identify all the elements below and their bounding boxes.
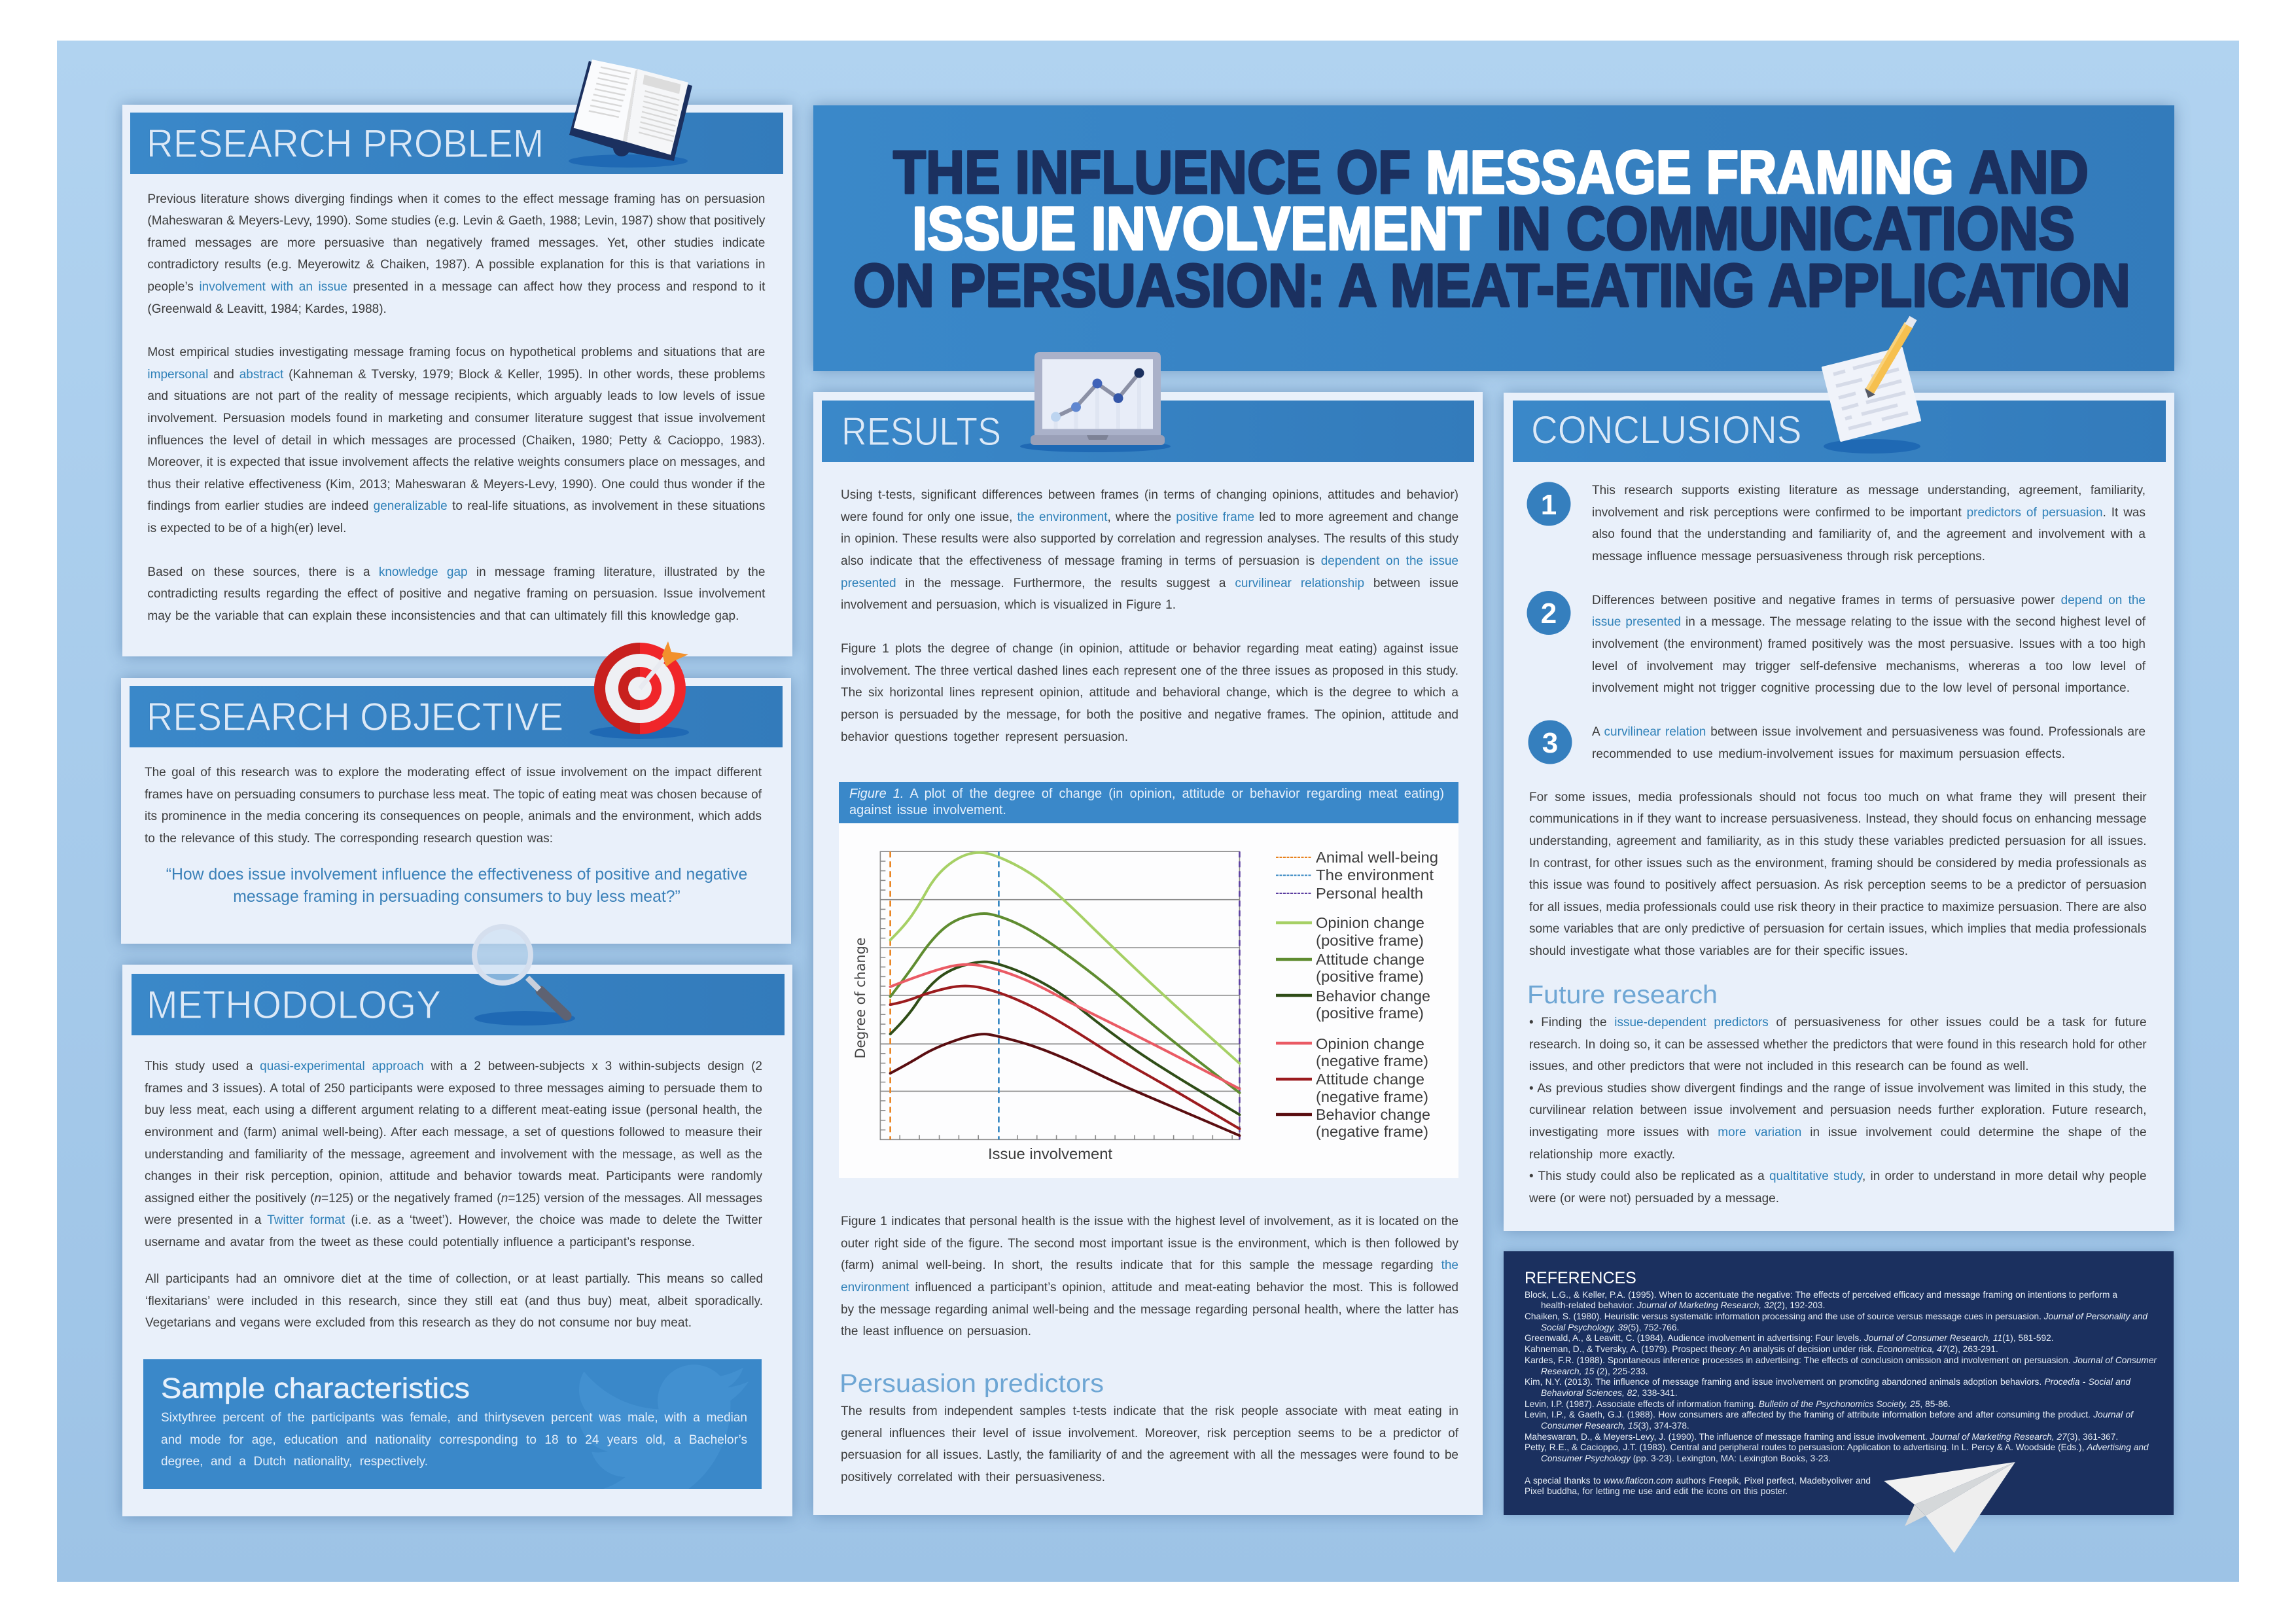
reference list: health-related behavior. Journal of Marketing Research, 32(2), 192-203. bbox=[1541, 1300, 1825, 1310]
header bar: research objective bbox=[130, 686, 783, 747]
title text: MESSAGE FRAMING bbox=[1426, 138, 1954, 206]
icon: laptop with line chart bbox=[1020, 352, 1171, 452]
line chart: degree of change vs issue involvement: Attitude change bbox=[1316, 1071, 1424, 1088]
icon: magnifying glass bbox=[474, 927, 575, 1026]
reference list: Maheswaran, D., & Meyers-Levy, J. (1990). The influence of message framing and issue involvement. Journal of Marketing Research, 27(3), 361-367. bbox=[1525, 1432, 2118, 1442]
text: sample characteristics: Sixtythree percent of the participants was female, and thirtyseven percent was male, with a median bbox=[161, 1411, 747, 1425]
text: results paragraph 1: were found for only one issue, the environment, where the positive frame led to more agreement and change bbox=[841, 510, 1458, 524]
text: research problem paragraph 3: Based on these sources, there is a knowledge gap in message framing literature, illustrated by the bbox=[147, 565, 765, 579]
text: conclusion 3: recommended to use medium-involvement issues for maximum persuasion effects. bbox=[1592, 747, 2065, 761]
icon: twitter bird watermark: Sample characteristics bbox=[161, 1372, 470, 1404]
text: media professionals advice: this issue was found to positively affect persuasion. As risk perception seems to be a predictor of persuasion bbox=[1529, 878, 2147, 892]
text: research objective bbox=[145, 766, 762, 846]
text: sample characteristics: and mode for age, education and nationality corresponding to 18 to 24 years old, a Bachelor’s bbox=[161, 1433, 747, 1447]
text: future research bullets: issues, and other predictors that were not included in this research can be found as well. bbox=[1529, 1060, 2028, 1073]
text: results paragraph 1: presented in the message. Furthermore, the results suggest a curvilinear relationship between issue bbox=[841, 577, 1458, 590]
number badge 2 bbox=[1527, 591, 1570, 635]
reference list: Behavioral Sciences, 82, 338-341. bbox=[1541, 1388, 1678, 1398]
text: conclusion 2 bbox=[1592, 594, 2146, 695]
text: methodology paragraph 2: All participants had an omnivore diet at the time of collection, or at least partially. This means so called bbox=[145, 1272, 763, 1286]
reference list: Block, L.G., & Keller, P.A. (1995). When to accentuate the negative: The effects of perceived efficacy and message framing on intentions to perform a bbox=[1525, 1290, 2117, 1300]
text: sample characteristics bbox=[161, 1411, 747, 1469]
line chart: degree of change vs issue involvement: The environment bbox=[1316, 866, 1434, 883]
text: results paragraph 1 bbox=[841, 488, 1458, 612]
text: methodology paragraph 2 bbox=[145, 1272, 763, 1330]
text: conclusion 2: involvement (the environment) framed positively was the most persuasive. Issues with a too high bbox=[1592, 637, 2146, 651]
reference list: Levin, I.P. (1987). Associate effects of information framing. Bulletin of the Psychonomics Society, 25, 85-86. bbox=[1525, 1399, 1951, 1409]
text: sample characteristics: degree, and a Dutch nationality, respectively. bbox=[161, 1455, 428, 1469]
text: media professionals advice: communications in if they want to increase persuasiveness. Instead, they should focus on enhancing message bbox=[1529, 812, 2147, 826]
panel: results bbox=[813, 392, 1483, 1515]
heading: results: RESULTS bbox=[841, 410, 1001, 454]
text: methodology paragraph 2: ‘flexitarians’ were included in this research, since they still eat (and thus buy) meat, albeit sporadically. bbox=[145, 1294, 763, 1308]
text: persuasion predictors: persuasion for all issues. Lastly, the familiarity of and the agreement with all the messages were found to be bbox=[841, 1448, 1458, 1462]
icon: note with pencil bbox=[1823, 318, 1920, 454]
line chart: degree of change vs issue involvement: Behavior change bbox=[1316, 1106, 1430, 1123]
text: conclusion 1: also found that the understanding and familiarity of, and the agreement and involvement with a bbox=[1592, 527, 2146, 541]
panel: poster title bbox=[813, 105, 2174, 371]
text: future research bullets: • Finding the issue-dependent predictors of persuasiveness for other issues could be a task for future bbox=[1529, 1016, 2147, 1029]
text: results paragraph 3: Figure 1 indicates that personal health is the issue with the highest level of involvement, as it is located on the bbox=[841, 1215, 1458, 1228]
line chart: degree of change vs issue involvement: Animal well-being bbox=[1316, 849, 1438, 866]
line chart: degree of change vs issue involvement: Behavior change bbox=[1316, 988, 1430, 1005]
text: results paragraph 1: Using t-tests, significant differences between frames (in terms of changing opinions, attitudes and behavior) bbox=[841, 488, 1458, 502]
line chart: degree of change vs issue involvement: (positive frame) bbox=[1316, 1005, 1424, 1022]
text: research problem paragraph 2: Most empirical studies investigating message framing focus on hypothetical problems and situations that are bbox=[147, 346, 765, 359]
line chart: degree of change vs issue involvement: (negative frame) bbox=[1316, 1123, 1428, 1140]
heading: research objective: RESEARCH OBJECTIVE bbox=[147, 695, 563, 739]
text: research problem paragraph 2: involvement. Persuasion models found in marketing and consumer literature suggest that issue involvement bbox=[147, 412, 765, 425]
figure caption bbox=[839, 782, 1458, 823]
line chart: degree of change vs issue involvement: Degree of change bbox=[853, 937, 868, 1059]
text: results paragraph 2: involvement. The three vertical dashed lines each represent one of the three issues as proposed in this study. bbox=[841, 664, 1458, 678]
figure 1 bbox=[839, 782, 1458, 1178]
text: research problem paragraph 3: may be the variable that can explain these inconsistencies and that can ultimately fill this knowledge gap. bbox=[147, 609, 739, 623]
line chart: degree of change vs issue involvement: (negative frame) bbox=[1316, 1088, 1428, 1105]
reference list: Social Psychology, 39(5), 752-766. bbox=[1541, 1323, 1679, 1332]
icon: open book bbox=[569, 60, 692, 168]
line chart: degree of change vs issue involvement: (negative frame) bbox=[1316, 1052, 1428, 1069]
title text: ISSUE INVOLVEMENT bbox=[912, 194, 1481, 262]
text: future research bullets bbox=[1529, 1016, 2147, 1205]
text: methodology paragraph 1: environment and (farm) animal well-being). After each message, a set of questions followed to measure their bbox=[145, 1126, 762, 1139]
text: methodology paragraph 1: frames and 3 issues). A total of 250 participants were exposed to three messages aiming to persuade them to bbox=[145, 1082, 762, 1096]
text: research problem paragraph 1: framed messages are more persuasive than negatively framed messages. Yet, other studies indicate bbox=[147, 236, 765, 250]
text: research problem paragraph 3 bbox=[147, 565, 766, 623]
reference list: Consumer Psychology (pp. 3-23). Lexington, MA: Lexington Books, 3-23. bbox=[1541, 1454, 1831, 1463]
number badge 1: 1 bbox=[1541, 489, 1557, 521]
text: research objective: to the relevance of this study. The corresponding research question was: bbox=[145, 832, 553, 846]
text: methodology paragraph 2: Vegetarians and vegans were excluded from this research as they do not consume nor buy meat. bbox=[145, 1316, 692, 1330]
number badge 3: 3 bbox=[1542, 727, 1558, 759]
text: methodology paragraph 1: understanding and familiarity of the message, agreement and involvement with the message, as well as the bbox=[145, 1148, 762, 1162]
text: media professionals advice: some variables that are only predictive of persuasion for certain issues, which implies that media professionals bbox=[1529, 922, 2147, 936]
icon credits bbox=[1525, 1476, 1871, 1496]
text: results paragraph 3 bbox=[841, 1215, 1458, 1338]
text: conclusion 2: level of involvement may trigger self-defensive mechanisms, whereras a too low level of bbox=[1592, 660, 2146, 673]
text: results paragraph 2: behavior questions together represent persuasion. bbox=[841, 730, 1128, 744]
heading: references: REFERENCES bbox=[1525, 1269, 1636, 1287]
text: conclusion 2: Differences between positive and negative frames in terms of persuasive power depend on the bbox=[1592, 594, 2146, 607]
line chart: degree of change vs issue involvement bbox=[853, 849, 1438, 1162]
research question callout: message framing in persuading consumers to buy less meat?” bbox=[233, 888, 680, 906]
text: results paragraph 1: also indicate that the effectiveness of message framing in terms of persuasion is dependent on the issue bbox=[841, 554, 1458, 568]
subheading: future research: Future research bbox=[1527, 981, 1718, 1009]
research question callout bbox=[166, 866, 747, 906]
text: research problem paragraph 2 bbox=[147, 346, 766, 535]
reference list: Petty, R.E., & Cacioppo, J.T. (1983). Central and peripheral routes to persuasion: Application to advertising. In L. Percy & A. Woodside (Eds.), Advertising and bbox=[1525, 1442, 2149, 1452]
text: media professionals advice: understanding, agreement and familiarity, as in this study these variables predicted persuasion for all issues. bbox=[1529, 834, 2147, 848]
panel: references bbox=[1504, 1251, 2174, 1515]
heading: methodology: METHODOLOGY bbox=[147, 983, 441, 1027]
text: media professionals advice: In contrast, for other issues such as the environment, framing should be considered by media professionals as bbox=[1529, 857, 2147, 870]
text: conclusion 1: This research supports existing literature as message understanding, agreement, familiarity, bbox=[1592, 484, 2146, 497]
reference list: Greenwald, A., & Leavitt, C. (1984). Audience involvement in advertising: Four levels. Journal of Consumer Research, 11(1), 581-592. bbox=[1525, 1333, 2053, 1343]
line chart: degree of change vs issue involvement: Attitude change bbox=[1316, 951, 1424, 968]
reference list: Levin, I.P., & Gaeth, G.J. (1988). How consumers are affected by the framing of attribute information before and after consuming the product. Journal of bbox=[1525, 1410, 2133, 1419]
line chart: degree of change vs issue involvement: (positive frame) bbox=[1316, 968, 1424, 985]
icon: target with arrow bbox=[590, 641, 689, 739]
heading: conclusions: CONCLUSIONS bbox=[1531, 408, 1802, 452]
text: research problem paragraph 1: people’s involvement with an issue presented in a message can affect how they process and respond to it bbox=[147, 280, 765, 294]
text: results paragraph 1: involvement and persuasion, which is visualized in Figure 1. bbox=[841, 598, 1176, 612]
text: methodology paragraph 1: assigned either the positively (n=125) or the negatively framed (n=125) version of the messages. All messages bbox=[145, 1192, 762, 1205]
text: future research bullets: curvilinear relation between issue involvement and persuasion needs further exploration. Future research, bbox=[1529, 1103, 2147, 1117]
panel: conclusions bbox=[1504, 393, 2174, 1231]
text: methodology paragraph 1: were presented in a Twitter format (i.e. as a ‘tweet’). However, the choice was made to delete the Twitter bbox=[145, 1213, 762, 1227]
number badge 2: 2 bbox=[1541, 597, 1557, 630]
reference list: Kardes, F.R. (1988). Spontaneous inference processes in advertising: The effects of conclusion omission and involvement on persuasion. Journal of Consumer bbox=[1525, 1355, 2157, 1365]
reference list bbox=[1525, 1290, 2157, 1463]
text: research problem paragraph 3: contradicting results regarding the effect of positive and negative framing on persuasion. Issue involvement bbox=[147, 587, 765, 601]
text: research objective: its prominence in the media concering its consequences on people, animals and the environment, which adds bbox=[145, 810, 762, 823]
text: results paragraph 3: the least influence on persuasion. bbox=[841, 1325, 1031, 1338]
text: research problem paragraph 1: contradictory results (e.g. Meyerowitz & Chaiken, 1987). A possible explanation for this is that variations in bbox=[147, 258, 765, 272]
text: research problem paragraph 2: thus their relative effectiveness (Kim, 2013; Maheswaran & Meyers-Levy, 1990). One could thus wonder if the bbox=[147, 478, 765, 491]
heading: research problem: RESEARCH PROBLEM bbox=[147, 122, 544, 166]
text: research problem paragraph 2: impersonal and abstract (Kahneman & Tversky, 1979; Block & Keller, 1995). In other words, these problems bbox=[147, 368, 765, 382]
callout: sample characteristics bbox=[143, 1359, 762, 1489]
text: results paragraph 3: (farm) animal well-being. In short, the results indicate that for this sample the message regarding the bbox=[841, 1258, 1458, 1272]
text: future research bullets: investigating more issues with more variation in issue involvement could determine the shape of the bbox=[1529, 1126, 2147, 1139]
text: research problem paragraph 2: findings from earlier studies are indeed generalizable to real-life situations, as involvement in these situations bbox=[147, 499, 765, 513]
text: conclusion 3 bbox=[1592, 725, 2146, 761]
panel: research problem bbox=[122, 105, 792, 656]
reference list: Consumer Research, 15(3), 374-378. bbox=[1541, 1421, 1689, 1431]
text: conclusion 3: A curvilinear relation between issue involvement and persuasiveness was found. Professionals are bbox=[1592, 725, 2146, 739]
icon: paper plane bbox=[1884, 1462, 2015, 1553]
text: research problem paragraph 2: Moreover, it is expected that issue involvement affects the relative weights consumers place on messages, and bbox=[147, 455, 765, 469]
text: persuasion predictors: The results from independent samples t-tests indicate that the risk people associate with meat eating in bbox=[841, 1404, 1458, 1418]
title text: THE INFLUENCE OF bbox=[893, 138, 1411, 206]
text: research objective: frames have on persuading consumers to purchase less meat. The topic of eating meat was chosen because of bbox=[145, 788, 762, 802]
line chart: degree of change vs issue involvement: Personal health bbox=[1316, 885, 1423, 902]
text: research problem paragraph 1: (Greenwald & Leavitt, 1984; Kardes, 1988). bbox=[147, 302, 387, 316]
figure caption: against issue involvement. bbox=[849, 802, 1006, 817]
icon credits: Pixel buddha, for letting me use and edit the icons on this poster. bbox=[1525, 1486, 1788, 1496]
header bar: conclusions bbox=[1513, 401, 2166, 462]
text: methodology paragraph 1: buy less meat, each using a different argument relating to a different meat-eating issue (personal health, the bbox=[145, 1103, 762, 1117]
text: results paragraph 2: person is persuaded by the message, for both the positive and negative frames. The opinion, attitude and bbox=[841, 708, 1458, 722]
icon credits: A special thanks to www.flaticon.com authors Freepik, Pixel perfect, Madebyoliver and bbox=[1525, 1476, 1871, 1486]
text: methodology paragraph 1: username and avatar from the tweet as these could potentially influence a participant’s response. bbox=[145, 1236, 695, 1249]
text: future research bullets: • As previous studies show divergent findings and the range of issue involvement was limited in this study, the bbox=[1529, 1082, 2147, 1096]
number badge 1 bbox=[1527, 482, 1570, 526]
title text bbox=[853, 138, 2130, 319]
text: media professionals advice: For some issues, media professionals should not focus too much on what frame they will present their bbox=[1529, 791, 2147, 804]
line chart: degree of change vs issue involvement: (positive frame) bbox=[1316, 932, 1424, 949]
panel: methodology bbox=[122, 965, 792, 1516]
reference list: Chaiken, S. (1980). Heuristic versus systematic information processing and the use of source versus message cues in persuasion. Journal of Personality and bbox=[1525, 1311, 2147, 1321]
text: research problem paragraph 1: (Maheswaran & Meyers-Levy, 1990). Some studies (e.g. Levin & Gaeth, 1988; Levin, 1987) show that positively bbox=[147, 214, 765, 228]
text: persuasion predictors bbox=[841, 1404, 1459, 1484]
text: conclusion 2: involvement might not trigger cognitive processing due to the low level of personal importance. bbox=[1592, 681, 2130, 695]
text: results paragraph 2: Figure 1 plots the degree of change (in opinion, attitude or behavior regarding meat eating) against issue bbox=[841, 642, 1458, 656]
text: results paragraph 2: The six horizontal lines represent opinion, attitude and behavioral change, which is the degree to which a bbox=[841, 686, 1458, 700]
reference list: Kahneman, D., & Tversky, A. (1979). Prospect theory: An analysis of decision under risk. Econometrica, 47(2), 263-291. bbox=[1525, 1344, 1998, 1354]
line chart: degree of change vs issue involvement: Opinion change bbox=[1316, 1035, 1424, 1052]
header bar: methodology bbox=[132, 974, 785, 1035]
text: results paragraph 1: in opinion. These results were also supported by correlation and regression analyses. The results of this study bbox=[841, 532, 1458, 546]
text: media professionals advice: for all issues, media professionals could use risk theory in their practice to maximize persuasion. There are also bbox=[1529, 901, 2147, 914]
text: research problem paragraph 2: is expected to be of a high(er) level. bbox=[147, 522, 346, 535]
text: research problem paragraph 1: Previous literature shows diverging findings when it comes to the effect message framing has on persuasion bbox=[147, 192, 765, 206]
text: conclusion 2: issue presented in a message. The message relating to the issue with the second highest level of bbox=[1592, 615, 2146, 629]
text: conclusion 1: message influence message persuasiveness through risk perceptions. bbox=[1592, 550, 1985, 563]
title text: ON PERSUASION: A MEAT-EATING APPLICATION bbox=[853, 251, 2130, 319]
header bar: results bbox=[822, 401, 1474, 462]
text: research problem paragraph 2: influences the level of detail in which messages are processed (Chaiken, 1980; Petty & Cacioppo, 1983). bbox=[147, 434, 765, 448]
text: conclusion 1: involvement and risk perceptions were confirmed to be important predictors of persuasion. It was bbox=[1592, 506, 2146, 520]
text: persuasion predictors: positively correlated with their persuasiveness. bbox=[841, 1471, 1105, 1484]
text: results paragraph 3: by the message regarding animal well-being and the message regarding personal health, where the latter has bbox=[841, 1303, 1458, 1317]
text: results paragraph 3: outer right side of the figure. The second most important issue is the environment, which is then followed by bbox=[841, 1237, 1458, 1251]
research question callout: “How does issue involvement influence the effectiveness of positive and negative bbox=[166, 866, 747, 883]
text: research problem paragraph 2: and situations are not part of the reality of message recipients, which arguably leads to low levels of issue bbox=[147, 389, 765, 403]
text: persuasion predictors: general influences their level of issue involvement. Moreover, risk perception seems to be a predictor of bbox=[841, 1427, 1458, 1440]
line chart: degree of change vs issue involvement: Issue involvement bbox=[988, 1145, 1112, 1162]
text: media professionals advice bbox=[1529, 791, 2147, 958]
text: methodology paragraph 1: changes in their risk perception, opinion, attitude and behavior towards meat. Participants were randomly bbox=[145, 1169, 762, 1183]
number badge 3 bbox=[1528, 720, 1572, 764]
text: methodology paragraph 1 bbox=[145, 1060, 762, 1249]
text: future research bullets: were (or were not) persuaded by a message. bbox=[1529, 1192, 1779, 1205]
text: results paragraph 3: environment influenced a participant’s opinion, attitude and meat-eating behavior the most. This is followed bbox=[841, 1281, 1458, 1294]
line chart: degree of change vs issue involvement: Opinion change bbox=[1316, 914, 1424, 931]
text: research objective: The goal of this research was to explore the moderating effect of issue involvement on the impact different bbox=[145, 766, 762, 779]
text: methodology paragraph 1: This study used a quasi-experimental approach with a 2 between-subjects x 3 within-subjects design (2 bbox=[145, 1060, 762, 1073]
figure caption: Figure 1. A plot of the degree of change (in opinion, attitude or behavior regarding meat eating) bbox=[849, 787, 1444, 801]
title text: IN COMMUNICATIONS bbox=[1496, 194, 2075, 262]
title text: AND bbox=[1969, 138, 2089, 206]
text: conclusion 1 bbox=[1592, 484, 2146, 563]
reference list: Research, 15 (2), 225-233. bbox=[1541, 1366, 1648, 1376]
text: research problem paragraph 1 bbox=[147, 192, 766, 316]
reference list: Kim, N.Y. (2013). The influence of message framing and issue involvement on promoting abandoned animals adoption behaviors. Procedia - Social and bbox=[1525, 1377, 2130, 1387]
header bar: research problem bbox=[130, 113, 783, 174]
panel: research objective bbox=[121, 678, 791, 944]
text: future research bullets: research. In doing so, it can be assessed whether the predictors that were found in this research hold for other bbox=[1529, 1038, 2147, 1052]
text: results paragraph 2 bbox=[841, 642, 1458, 744]
text: media professionals advice: should investigate what those variables are for their specific issues. bbox=[1529, 944, 1908, 958]
subheading: persuasion predictors: Persuasion predictors bbox=[839, 1370, 1104, 1398]
text: future research bullets: relationship more exactly. bbox=[1529, 1148, 1675, 1162]
text: future research bullets: • This study could also be replicated as a qualtitative study, in order to understand in more detail why people bbox=[1529, 1169, 2147, 1183]
